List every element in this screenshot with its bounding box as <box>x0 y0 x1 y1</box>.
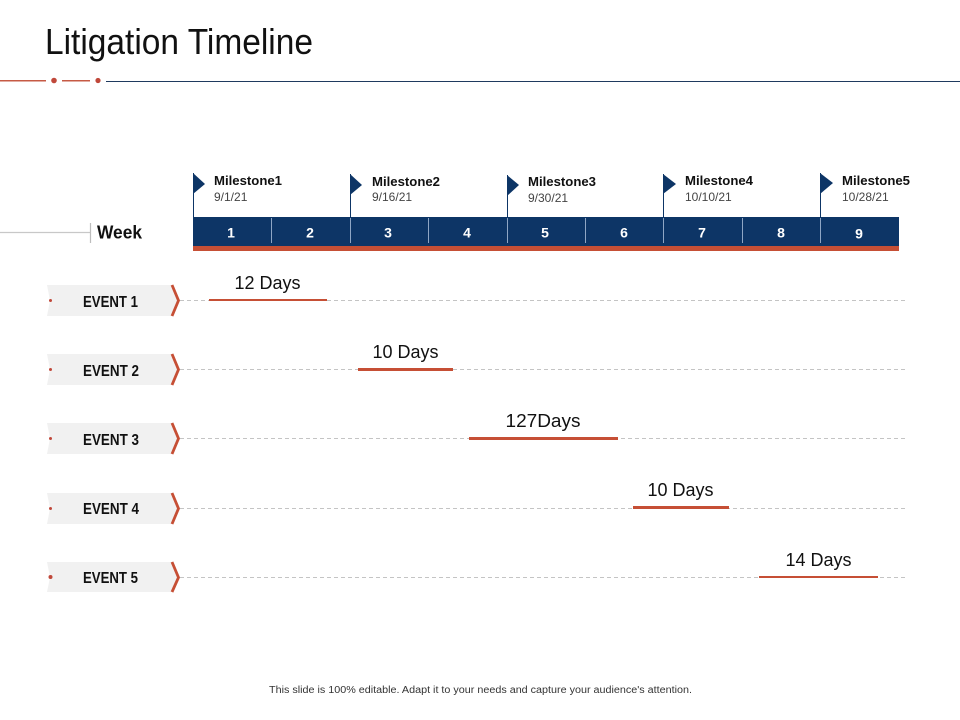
event row 3: EVENT 3 <box>83 432 139 449</box>
milestone 1: 9/1/21 <box>214 190 248 204</box>
milestone 2: Milestone2 <box>372 174 440 189</box>
milestone 3: 9/30/21 <box>528 191 568 205</box>
week bar: 3 <box>384 224 392 240</box>
milestone 4 <box>663 173 754 217</box>
week bar: 9 <box>855 226 863 242</box>
milestone 3: Milestone3 <box>528 174 596 189</box>
event row 3: 127Days <box>506 411 580 431</box>
milestone 5: 10/28/21 <box>842 190 889 204</box>
week bar: 7 <box>698 224 706 240</box>
event row 5 <box>47 550 908 592</box>
event row 2 <box>47 342 908 385</box>
week bar: 8 <box>777 224 785 240</box>
week bar <box>193 217 899 251</box>
milestone 3 <box>507 174 596 217</box>
header rule with dots <box>0 78 960 83</box>
event row 1 <box>47 273 908 316</box>
week bar: 2 <box>306 224 314 240</box>
milestone 1 <box>193 173 282 217</box>
week bar: 1 <box>227 224 235 240</box>
week bar: 4 <box>463 224 471 240</box>
event row 5: EVENT 5 <box>83 570 138 587</box>
event row 2: 10 Days <box>372 342 439 362</box>
week bar: 5 <box>541 224 549 240</box>
event row 4 <box>47 480 908 524</box>
event row 2: EVENT 2 <box>83 363 139 380</box>
milestone 5: Milestone5 <box>842 173 910 188</box>
event row 1: EVENT 1 <box>83 294 138 311</box>
week bar: 6 <box>620 224 628 240</box>
event row 5: 14 Days <box>785 550 852 570</box>
footer note: This slide is 100% editable. Adapt it to your needs and capture your audience's attention. <box>269 685 692 696</box>
title: Litigation Timeline <box>45 21 313 62</box>
milestone 4: Milestone4 <box>685 173 754 188</box>
event row 1: 12 Days <box>234 273 301 293</box>
milestone 2: 9/16/21 <box>372 190 412 204</box>
milestone 1: Milestone1 <box>214 173 282 188</box>
event row 4: 10 Days <box>647 480 714 500</box>
event row 4: EVENT 4 <box>83 501 139 518</box>
milestone 5 <box>820 173 910 217</box>
milestone 4: 10/10/21 <box>685 190 732 204</box>
event row 3 <box>47 411 908 454</box>
milestone 2 <box>350 174 440 217</box>
week label with connector: Week <box>97 222 143 242</box>
